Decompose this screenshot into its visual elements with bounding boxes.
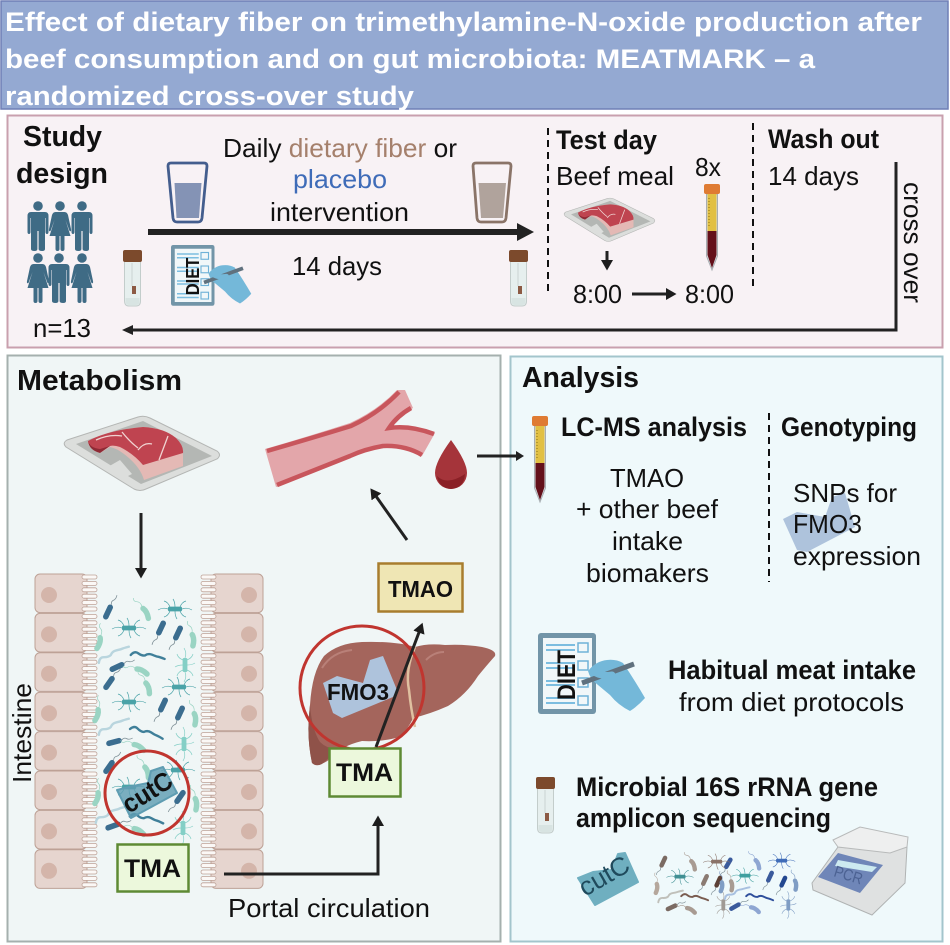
genotyping details: expression — [793, 541, 921, 571]
end time: 8:00 — [685, 279, 734, 309]
enzyme cutC tag: cutC — [573, 849, 635, 902]
icon: PCR machine: PCR — [832, 864, 865, 888]
microbiota cluster — [649, 851, 801, 919]
icon: fiber glass — [473, 163, 511, 222]
icon: diet protocol — [171, 245, 251, 306]
intervention text: placebo — [293, 164, 387, 194]
beef meal label: Beef meal — [556, 161, 674, 191]
LC-MS targets — [576, 463, 719, 588]
panel: analysis — [509, 356, 942, 942]
icon: liver — [308, 642, 495, 765]
habitual meat intake text: Habitual meat intake — [668, 655, 916, 685]
LC-MS targets: TMAO — [610, 463, 684, 493]
LC-MS targets: biomakers — [586, 558, 709, 588]
intestine label: Intestine — [7, 683, 37, 783]
cross over label: cross over — [898, 182, 928, 303]
sequencing text: Microbial 16S rRNA gene — [576, 772, 878, 802]
icon: diet protocol: DIET — [182, 257, 203, 295]
habitual meat intake text — [668, 655, 916, 717]
icon: PCR machine — [812, 827, 908, 915]
intervention text — [223, 133, 457, 227]
intervention text: Daily dietary fiber or — [223, 133, 457, 163]
icon: stool vial end — [509, 250, 528, 306]
title banner: randomized cross-over study — [5, 81, 414, 111]
label: TMA at liver — [330, 748, 400, 796]
panel: metabolism — [7, 356, 510, 942]
arrow: cross over — [122, 162, 896, 335]
label: TMA at liver: TMA — [336, 759, 393, 787]
arrow: portal circulation — [224, 820, 378, 874]
arrow: TMA to TMAO — [376, 627, 421, 747]
portal circulation label: Portal circulation — [228, 893, 430, 923]
heading: genotyping: Genotyping — [781, 412, 917, 442]
sequencing text: amplicon sequencing — [576, 803, 831, 833]
heading: LC-MS: LC-MS analysis — [561, 412, 747, 442]
enzyme FMO3: FMO3 — [327, 679, 389, 705]
heading: metabolism: Metabolism — [17, 365, 182, 397]
heading: analysis: Analysis — [522, 362, 639, 394]
icon: placebo glass — [168, 163, 207, 222]
duration label: 14 days — [292, 251, 382, 281]
icon: FMO3 shape — [783, 493, 855, 552]
arrow: liver to blood — [373, 492, 407, 540]
wash out heading: Wash out — [768, 124, 879, 154]
arrow: into tube — [509, 451, 524, 461]
enzyme cutC: cutC — [116, 765, 178, 819]
icon: diet protocol — [538, 633, 645, 714]
label: TMAO — [378, 564, 462, 612]
gut microbiota — [91, 594, 203, 845]
sequencing text — [576, 772, 878, 833]
start time: 8:00 — [573, 279, 622, 309]
participant count: n=13 — [33, 313, 91, 343]
heading: study design: Study — [23, 121, 102, 153]
intestine wall cells — [35, 574, 263, 888]
test day heading: Test day — [556, 125, 657, 155]
samples count: 8x — [695, 152, 721, 182]
icon: blood tube — [704, 184, 720, 270]
icon: beef tray — [564, 198, 655, 242]
title banner: Effect of dietary fiber on trimethylamine-N-oxide production after — [5, 7, 923, 37]
icon: stool vial baseline — [123, 250, 142, 306]
icon: blood drop — [435, 440, 467, 489]
icon: stool vial — [536, 777, 555, 833]
arrow: intervention timeline — [148, 223, 534, 241]
label: TMA in intestine: TMA — [124, 855, 181, 883]
divider: test day — [547, 128, 549, 295]
icon: beef tray — [64, 416, 219, 490]
divider: wash out — [752, 123, 754, 290]
enzyme FMO3 — [323, 656, 397, 718]
icon: diet protocol: DIET — [553, 650, 581, 700]
icon: blood vessel — [265, 390, 435, 487]
arrow: meal to time — [606, 251, 608, 266]
icon: participants — [27, 201, 93, 303]
label: TMAO: TMAO — [388, 576, 453, 602]
intervention text: intervention — [270, 197, 409, 227]
heading: study design: design — [16, 158, 108, 190]
arrow: blood to analysis — [477, 454, 510, 458]
highlight ring: cutC — [105, 751, 189, 835]
divider: genotyping — [768, 413, 770, 582]
title banner: beef consumption and on gut microbiota: MEATMARK – a — [5, 44, 816, 74]
arrow: beef to intestine — [140, 513, 142, 574]
LC-MS targets: + other beef — [576, 494, 719, 524]
heading: study design — [16, 121, 108, 190]
highlight ring: FMO3 — [300, 626, 424, 750]
wash out duration: 14 days — [768, 161, 859, 191]
icon: plasma tube — [532, 416, 548, 502]
arrow: time span — [632, 292, 672, 296]
label: TMA in intestine — [118, 844, 188, 892]
habitual meat intake text: from diet protocols — [679, 687, 904, 717]
panel: study design — [8, 116, 942, 348]
genotyping details — [793, 478, 921, 571]
title banner — [1, 1, 948, 111]
genotyping details: FMO3 — [793, 509, 862, 539]
genotyping details: SNPs for — [793, 478, 897, 508]
LC-MS targets: intake — [612, 526, 683, 556]
